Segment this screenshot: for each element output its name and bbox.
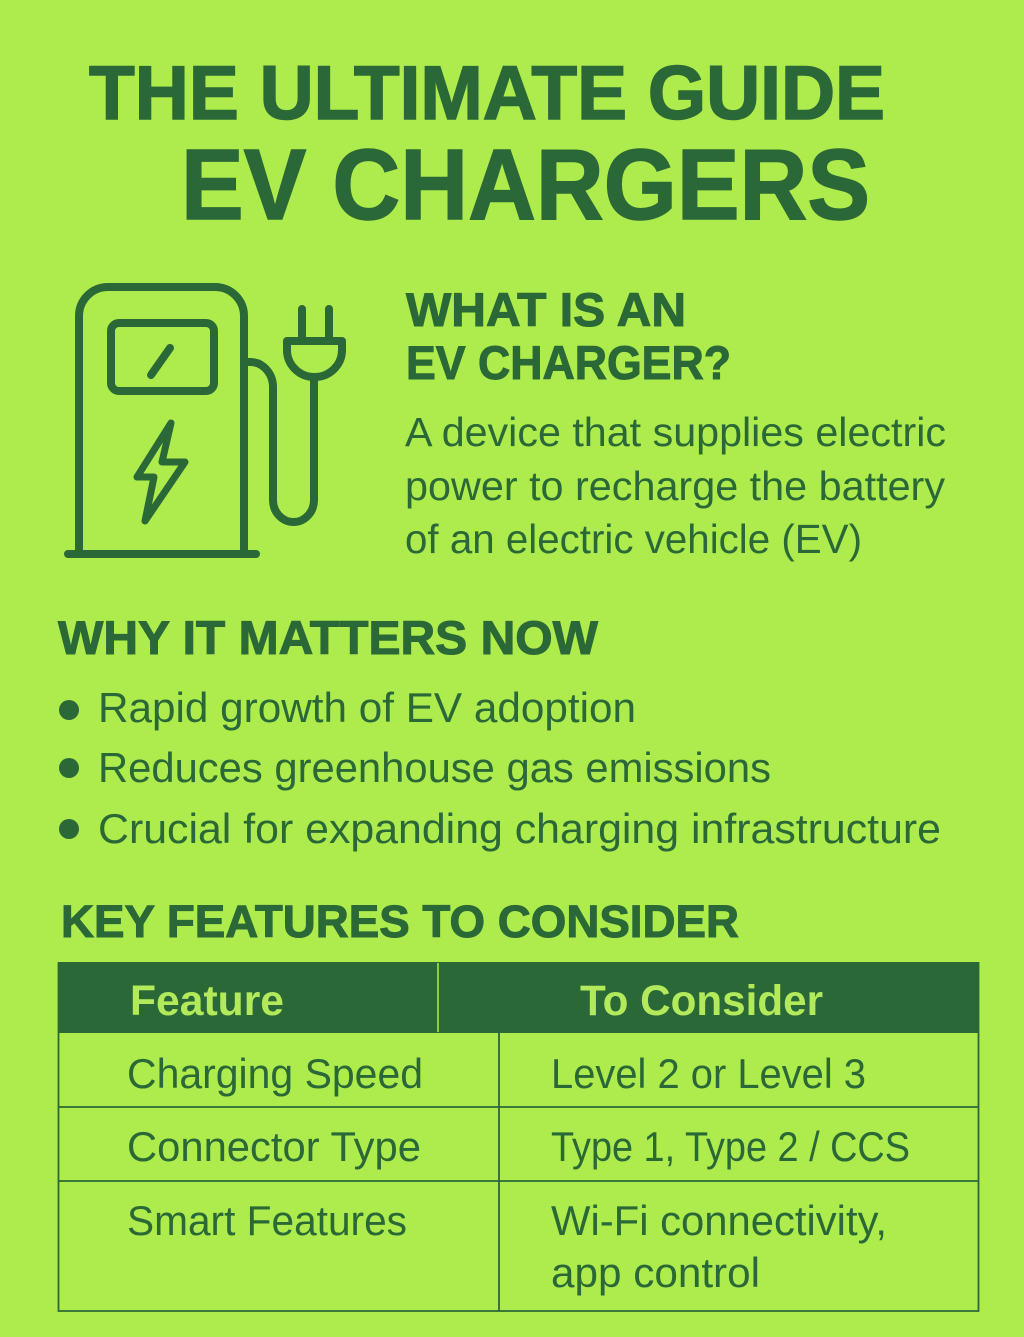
definition text: A device that supplies electric: [405, 409, 946, 455]
row: smart features: Wi-Fi connectivity,: [551, 1197, 887, 1244]
row: charging speed: [127, 1050, 866, 1097]
bullet list: [59, 684, 941, 852]
row: charging speed: Level 2 or Level 3: [551, 1050, 866, 1097]
title: THE ULTIMATE GUIDE: [89, 51, 885, 136]
heading: key features to consider: KEY FEATURES TO CONSIDER: [61, 896, 739, 947]
definition text: power to recharge the battery: [405, 463, 945, 509]
heading: what is an EV charger: EV CHARGER?: [406, 336, 731, 389]
row: connector type: Connector Type: [127, 1123, 421, 1170]
section: why it matters now: [58, 611, 941, 852]
row: smart features: Smart Features: [127, 1197, 407, 1244]
row: charging speed: Charging Speed: [127, 1050, 423, 1097]
title: EV CHARGERS: [181, 129, 870, 241]
features table: [58, 962, 979, 1311]
definition text: [405, 409, 946, 562]
definition text: of an electric vehicle (EV): [405, 516, 862, 562]
section: what is an EV charger: [405, 283, 946, 562]
bullet list: Rapid growth of EV adoption: [98, 684, 636, 731]
bullet list: Crucial for expanding charging infrastructure: [98, 805, 941, 852]
heading: what is an EV charger: [406, 283, 731, 389]
row: smart features: app control: [551, 1249, 760, 1296]
table header: To Consider: [580, 977, 823, 1025]
heading: what is an EV charger: WHAT IS AN: [406, 283, 686, 336]
row: connector type: [127, 1123, 910, 1170]
table header: Feature: [130, 977, 284, 1025]
title: [89, 51, 885, 241]
row: connector type: Type 1, Type 2 / CCS: [551, 1123, 910, 1170]
bullet list: Reduces greenhouse gas emissions: [98, 744, 771, 791]
row: smart features: [127, 1197, 887, 1296]
icon: EV charging station: [68, 287, 342, 554]
section: key features: [58, 896, 979, 1311]
table header: [58, 962, 979, 1033]
heading: why it matters now: WHY IT MATTERS NOW: [58, 611, 599, 664]
